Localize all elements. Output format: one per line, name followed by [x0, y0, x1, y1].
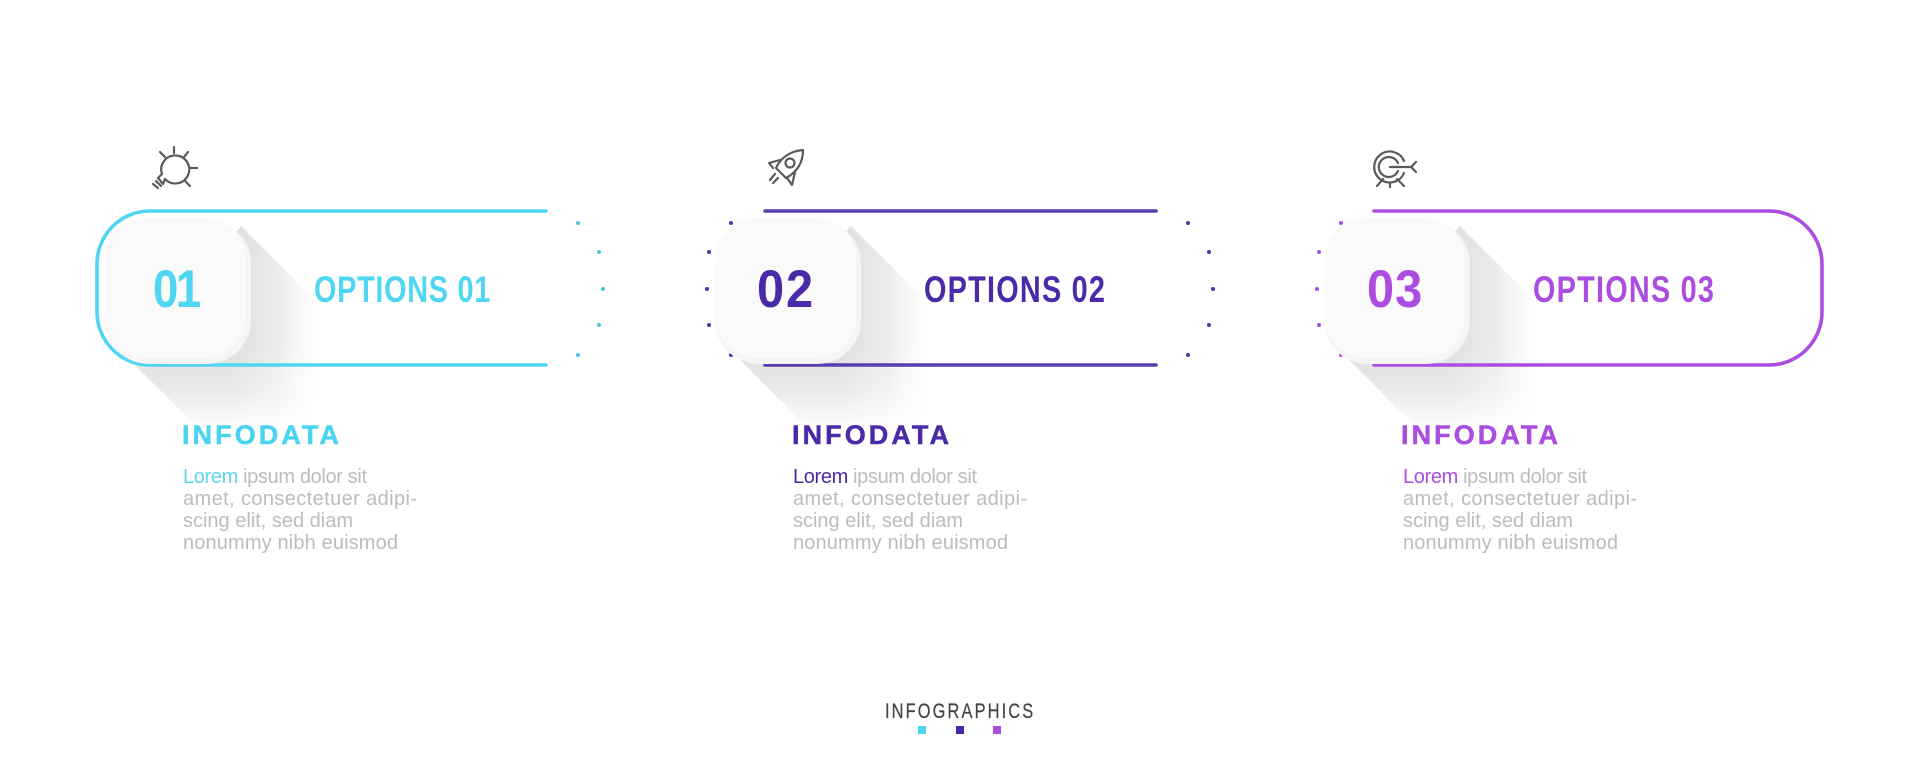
label: options 03: OPTIONS 03: [1533, 270, 1714, 311]
number tile: [105, 218, 251, 364]
body text: [1403, 466, 1637, 554]
body text: [183, 466, 417, 554]
number 02: 02: [757, 259, 813, 318]
outline bracket: [97, 211, 546, 365]
body text: nonummy nibh euismod: [793, 532, 1008, 554]
heading: infodata: INFODATA: [1401, 420, 1558, 450]
icon: target: [1374, 152, 1416, 187]
top and bottom lines: [765, 211, 1156, 365]
long shadow: [134, 226, 300, 416]
long shadow: [740, 226, 908, 416]
outline bracket: [1374, 211, 1822, 365]
panel: option 02: [705, 150, 1215, 554]
heading: infodata: INFODATA: [182, 420, 339, 450]
heading: infodata: INFODATA: [792, 420, 949, 450]
body text: Lorem ipsum dolor sit: [793, 466, 977, 488]
body text: scing elit, sed diam: [183, 510, 353, 532]
body text: Lorem ipsum dolor sit: [183, 466, 367, 488]
panel: option 01: [97, 147, 605, 554]
footer colour squares: [918, 726, 1001, 734]
long shadow: [1349, 226, 1520, 416]
icon: light bulb: [153, 147, 197, 188]
panel: option 03: [1315, 152, 1822, 554]
body text: scing elit, sed diam: [793, 510, 963, 532]
body text: amet, consectetuer adipi-: [1403, 488, 1637, 510]
dots: [705, 221, 1215, 357]
number 01: 01: [153, 260, 201, 319]
number 03: 03: [1367, 259, 1422, 318]
body text: [793, 466, 1027, 554]
body text: Lorem ipsum dolor sit: [1403, 466, 1587, 488]
dots: [1315, 221, 1343, 357]
body text: nonummy nibh euismod: [183, 532, 398, 554]
body text: amet, consectetuer adipi-: [793, 488, 1027, 510]
body text: nonummy nibh euismod: [1403, 532, 1618, 554]
label: options 01: OPTIONS 01: [314, 270, 490, 311]
label: options 02: OPTIONS 02: [924, 270, 1105, 311]
icon: rocket: [769, 150, 803, 185]
number tile: [715, 218, 861, 364]
footer title: INFOGRAPHICS: [885, 699, 1033, 722]
number tile: [1324, 218, 1470, 364]
dots: [576, 221, 605, 357]
body text: scing elit, sed diam: [1403, 510, 1573, 532]
body text: amet, consectetuer adipi-: [183, 488, 417, 510]
